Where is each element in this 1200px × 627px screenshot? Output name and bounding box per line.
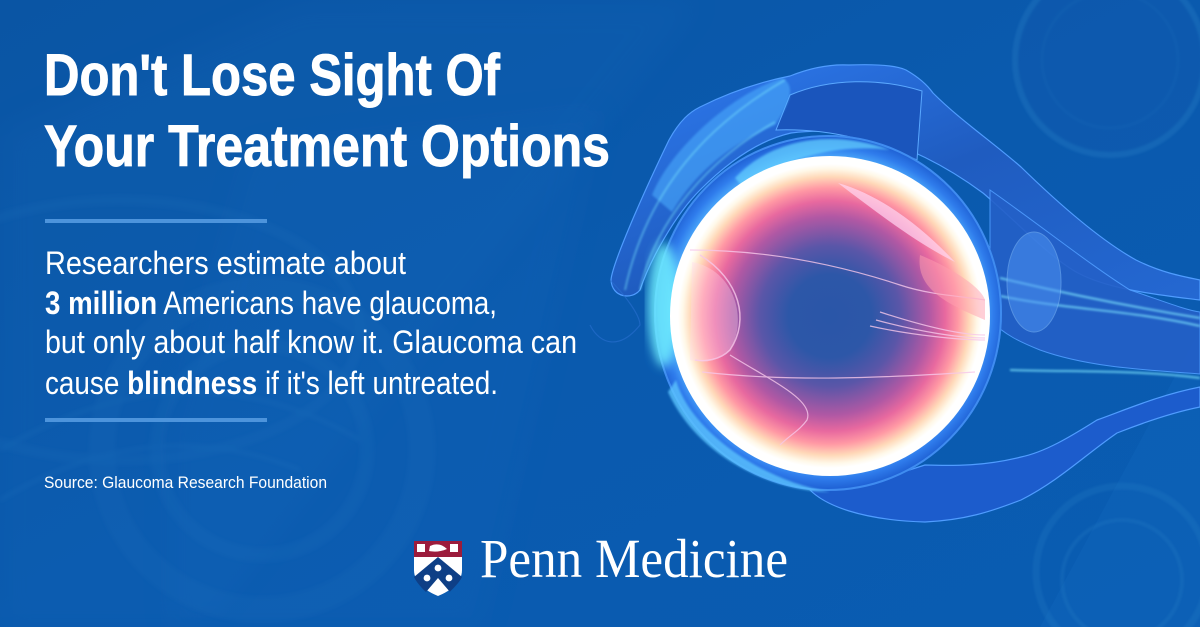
title: Your Treatment Options xyxy=(44,114,610,179)
upper muscle band xyxy=(611,65,1200,300)
body text xyxy=(45,245,577,401)
decorative faint rings: bottom right xyxy=(1036,486,1200,627)
cyan medial band xyxy=(652,78,790,212)
body text: cause blindness if it's left untreated. xyxy=(45,365,498,401)
inner eye lines xyxy=(690,250,985,445)
Penn Medicine logo xyxy=(414,528,788,596)
body text: but only about half know it. Glaucoma can xyxy=(45,324,577,360)
title: Don't Lose Sight Of xyxy=(44,43,501,108)
wordmark: Penn Medicine xyxy=(480,528,788,589)
sclera highlights xyxy=(735,139,890,186)
cornea outline xyxy=(590,280,640,342)
iris highlights xyxy=(838,183,955,262)
body text: 3 million Americans have glaucoma, xyxy=(45,285,497,321)
lower muscle band xyxy=(810,387,1200,522)
title xyxy=(44,43,610,179)
shield xyxy=(414,541,462,596)
body text: Researchers estimate about xyxy=(45,245,406,281)
optic nerve bands xyxy=(990,190,1200,374)
top divider xyxy=(45,219,267,223)
bottom divider xyxy=(45,418,267,422)
upper muscle inner sheen xyxy=(776,82,922,160)
optic nerve sheath xyxy=(1007,232,1061,332)
decorative faint rings: left xyxy=(0,200,422,610)
iris disc xyxy=(670,156,990,476)
eye illustration xyxy=(590,65,1200,522)
source: Source: Glaucoma Research Foundation xyxy=(44,474,327,492)
sclera xyxy=(654,135,1002,491)
decorative faint rings: top right xyxy=(1015,0,1200,155)
